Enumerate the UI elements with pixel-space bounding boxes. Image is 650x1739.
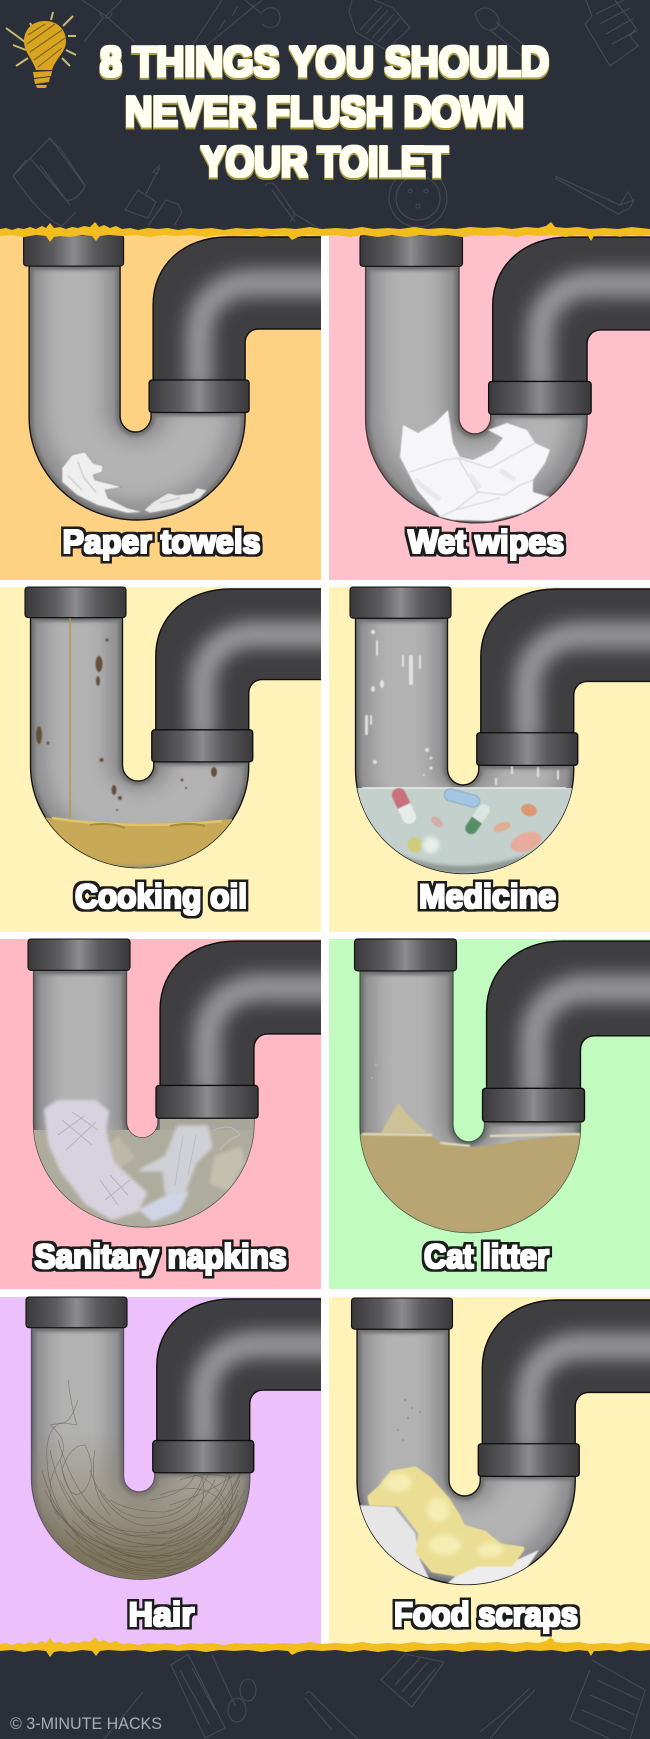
footer panel bbox=[0, 1650, 650, 1739]
label: Wet wipes bbox=[408, 523, 564, 560]
panel: cooking oil bbox=[0, 586, 321, 932]
bottom jagged yellow band bbox=[0, 1637, 650, 1657]
clog: cooking oil with grease spots bbox=[36, 614, 232, 880]
pipe: upper bend, collar and cap bbox=[25, 1296, 321, 1474]
bulb screw base bbox=[33, 71, 52, 88]
pipe: upper bend, collar and cap bbox=[24, 586, 321, 762]
label: Paper towels bbox=[62, 523, 260, 560]
top jagged yellow band bbox=[0, 222, 650, 242]
pill: green and white capsule bbox=[464, 804, 490, 835]
pipe: upper bend, collar and cap bbox=[354, 939, 650, 1122]
panel: paper towels bbox=[0, 235, 321, 580]
panel: food scraps bbox=[329, 1297, 650, 1647]
pipe: lower glass section bbox=[31, 607, 249, 868]
panel: medicine bbox=[329, 587, 650, 932]
footer credit: © 3-MINUTE HACKS bbox=[10, 1714, 162, 1733]
label: Food scraps bbox=[394, 1596, 578, 1634]
label: Sanitary napkins bbox=[34, 1238, 286, 1276]
clog: crumpled paper towels bbox=[62, 452, 207, 513]
bulb hatching bbox=[27, 24, 65, 67]
title line 3: YOUR TOILET bbox=[201, 138, 448, 186]
title line 1: 8 THINGS YOU SHOULD bbox=[100, 38, 549, 86]
label: Cooking oil bbox=[75, 878, 247, 916]
pill: blue capsule bbox=[443, 788, 481, 808]
pipe: lower glass section bbox=[360, 960, 580, 1233]
panel: sanitary napkins bbox=[0, 938, 321, 1289]
bulb glass bbox=[24, 21, 66, 70]
clog: water with napkins bbox=[34, 1098, 254, 1227]
clog: tangled hair bbox=[32, 1380, 250, 1580]
label: Cat litter bbox=[424, 1238, 549, 1276]
pipe: lower glass section bbox=[366, 255, 587, 523]
pipe: upper bend, collar and cap bbox=[23, 235, 321, 414]
pipe: upper bend, collar and cap bbox=[27, 938, 321, 1119]
clog: water with pills bbox=[357, 629, 572, 874]
header panel bbox=[0, 0, 650, 232]
title bbox=[100, 38, 549, 186]
clog: food scraps bbox=[355, 1399, 539, 1590]
icon: lightbulb bbox=[6, 12, 76, 88]
panel: wet wipes bbox=[329, 235, 650, 580]
pipe: upper bend, collar and cap bbox=[350, 587, 650, 765]
pipe: lower glass section bbox=[32, 1317, 250, 1579]
pipe: lower glass section bbox=[29, 255, 245, 520]
title line 2: NEVER FLUSH DOWN bbox=[125, 88, 524, 136]
pipe: lower glass section bbox=[356, 607, 574, 873]
pipe: lower glass section bbox=[34, 959, 254, 1227]
bulb rays bbox=[6, 12, 76, 66]
panel: hair bbox=[0, 1296, 321, 1645]
pill: red and white capsule bbox=[391, 788, 416, 824]
clog: wet wipes bbox=[400, 410, 550, 521]
footer background icons bbox=[104, 1654, 645, 1739]
pipe: upper bend, collar and cap bbox=[360, 235, 650, 414]
header background icons bbox=[13, 0, 638, 228]
pipe: lower glass section bbox=[357, 1318, 575, 1584]
pipe: upper bend, collar and cap bbox=[352, 1298, 650, 1476]
label: Hair bbox=[128, 1596, 194, 1634]
panel: cat litter bbox=[329, 939, 650, 1289]
clog: cat litter sludge bbox=[360, 1059, 580, 1232]
label: Medicine bbox=[419, 878, 556, 916]
